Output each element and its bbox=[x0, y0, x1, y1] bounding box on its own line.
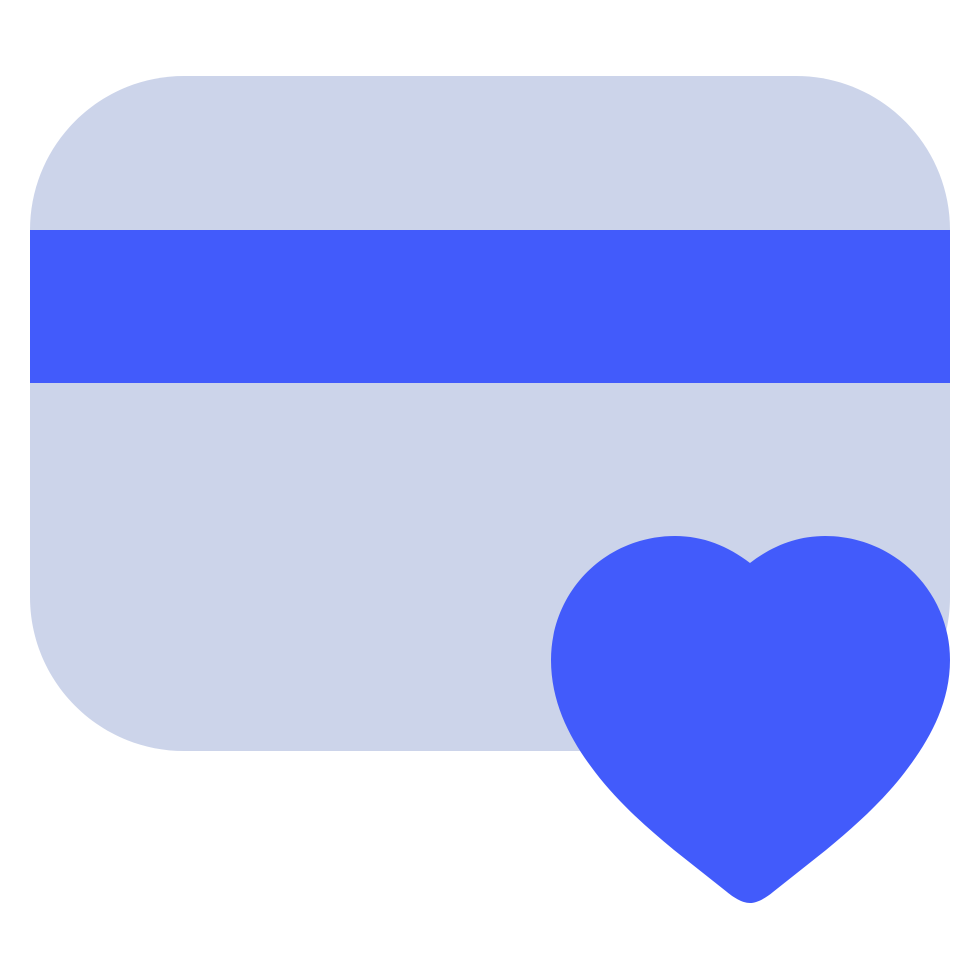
heart bbox=[551, 536, 950, 903]
card stripe bbox=[30, 230, 950, 383]
card body bbox=[30, 76, 950, 751]
